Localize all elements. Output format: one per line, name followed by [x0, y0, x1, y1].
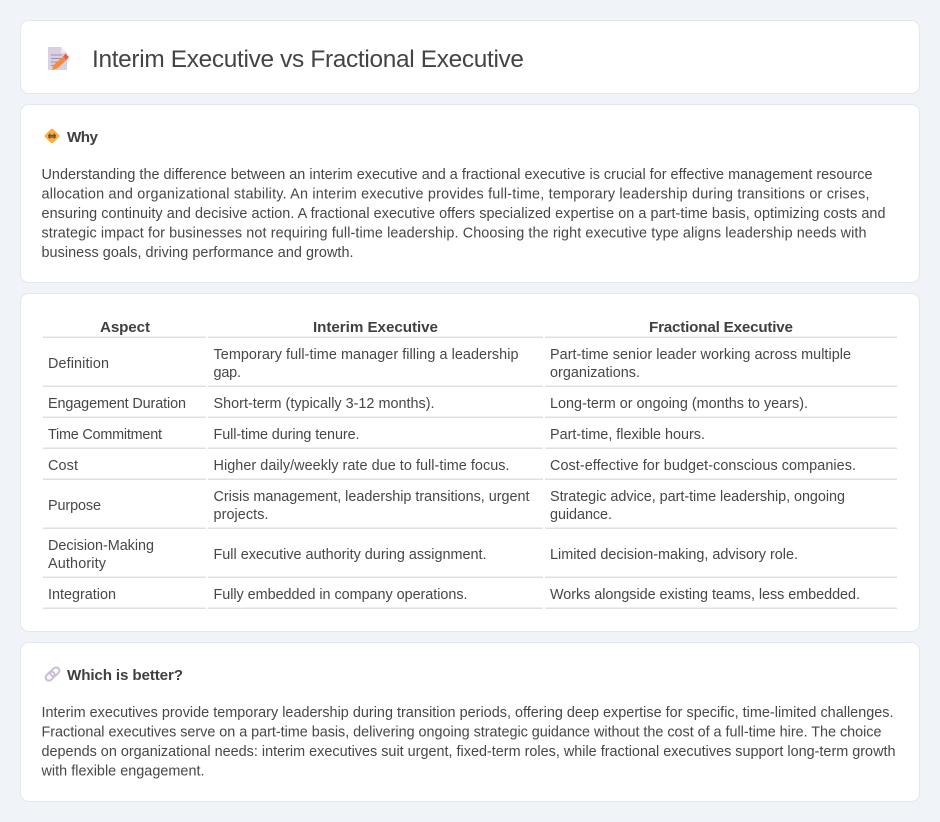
text block: why paragraph: allocation and organizational stability. An interim executive provides full-time, temporary leadership during transitions or crises, [42, 186, 870, 202]
row: purpose: Strategic advice, part-time leadership, ongoing [550, 489, 845, 505]
row: engagement duration: Long-term or ongoing (months to years). [550, 396, 808, 412]
row: purpose: projects. [214, 507, 268, 523]
row: engagement duration: Engagement Duration [48, 396, 186, 412]
row: decision-making authority: Limited decision-making, advisory role. [550, 547, 798, 563]
row: decision-making authority: Authority [48, 556, 107, 572]
row: purpose [48, 489, 845, 523]
panel: title card [20, 20, 920, 94]
icon: road sign diamond [44, 128, 60, 144]
text block: why paragraph: Understanding the difference between an interim executive and a fractional executive is crucial for effective management resource [42, 167, 872, 183]
row: definition: gap. [214, 365, 241, 381]
row: definition: organizations. [550, 365, 640, 381]
text block: why paragraph [42, 167, 886, 261]
row: engagement duration [48, 396, 808, 412]
icon: chain link [44, 666, 61, 682]
row: decision-making authority: Full executive authority during assignment. [214, 547, 486, 563]
text block: why paragraph: strategic impact for businesses not requiring full-time leadership. Choosing the right executive type aligns leadership needs with [42, 226, 866, 242]
row: engagement duration: Short-term (typically 3-12 months). [214, 396, 434, 412]
table header: Aspect [100, 319, 150, 336]
table header [100, 319, 793, 336]
row: definition: Part-time senior leader working across multiple [550, 347, 851, 363]
icon: document with pencil [48, 47, 69, 70]
row: integration [48, 587, 860, 603]
row: cost [48, 458, 856, 474]
text block: which is better paragraph: Fractional executives serve on a part-time basis, delivering ongoing strategic guidance without the cost of a full-time hire. The choice [42, 724, 882, 740]
row: definition [48, 347, 851, 381]
panel: which is better [20, 642, 920, 802]
row: integration: Fully embedded in company operations. [214, 587, 468, 603]
row: time commitment: Time Commitment [48, 427, 162, 443]
row: integration: Integration [48, 587, 116, 603]
text block: why paragraph: ensuring continuity and decisive action. A fractional executive offers specialized expertise on a part-time basis, optimizing costs and [42, 206, 886, 222]
row: time commitment [48, 427, 705, 443]
row: purpose: Purpose [48, 498, 101, 514]
table header: Fractional Executive [649, 319, 793, 336]
table header: Interim Executive [313, 319, 438, 336]
text block: why paragraph: business goals, driving performance and growth. [42, 245, 354, 261]
heading: why: Why [67, 129, 99, 146]
text block: which is better paragraph: depends on organizational needs: interim executives suit urgent, fixed-term roles, while fractional executives support long-term growth [42, 744, 896, 760]
row: cost: Higher daily/weekly rate due to full-time focus. [214, 458, 510, 474]
row: definition: Definition [48, 356, 109, 372]
heading: which is better: Which is better? [67, 667, 183, 684]
row: decision-making authority: Decision-Making [48, 538, 154, 554]
text block: which is better paragraph [40, 705, 896, 780]
text block: which is better paragraph: with flexible engagement. [40, 764, 204, 780]
row: time commitment: Full-time during tenure. [214, 427, 360, 443]
title: Interim Executive vs Fractional Executive [92, 46, 524, 73]
panel: comparison table [20, 294, 920, 632]
row: time commitment: Part-time, flexible hours. [550, 427, 705, 443]
row: cost: Cost-effective for budget-conscious companies. [550, 458, 856, 474]
row: cost: Cost [48, 458, 78, 474]
row: decision-making authority [48, 538, 798, 572]
panel: why [20, 104, 920, 282]
row: purpose: guidance. [550, 507, 612, 523]
text block: which is better paragraph: Interim executives provide temporary leadership during transition periods, offering deep expertise for specific, time-limited challenges. [42, 705, 894, 721]
row: integration: Works alongside existing teams, less embedded. [550, 587, 860, 603]
row: definition: Temporary full-time manager filling a leadership [214, 347, 518, 363]
row: purpose: Crisis management, leadership transitions, urgent [214, 489, 530, 505]
